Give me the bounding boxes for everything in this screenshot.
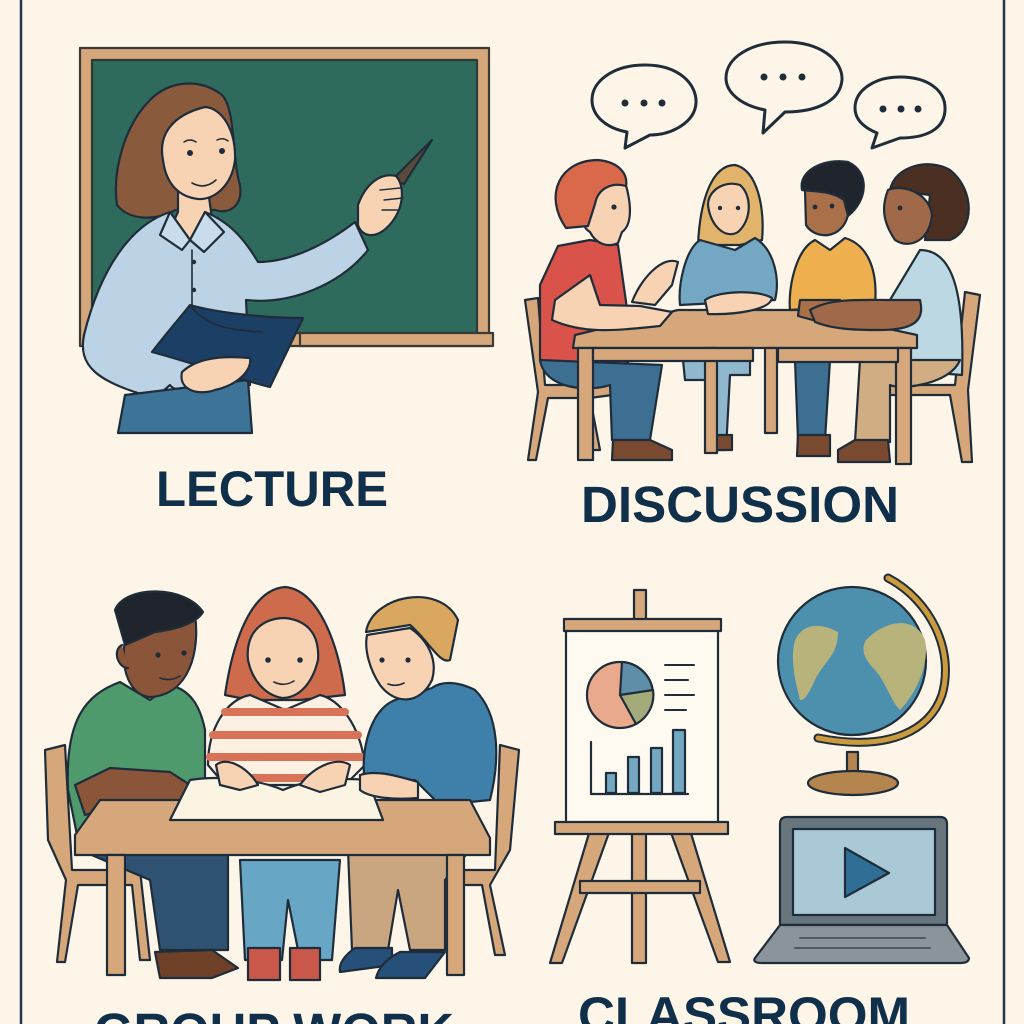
student: green shirt xyxy=(68,591,238,978)
laptop with play icon xyxy=(754,817,969,963)
panel: group work xyxy=(45,587,519,980)
student: striped shirt xyxy=(208,587,365,980)
table xyxy=(573,310,917,464)
easel xyxy=(550,590,730,963)
hand and pointer xyxy=(392,140,432,184)
panel: lecture xyxy=(80,48,493,433)
hands on book xyxy=(216,762,418,799)
heading: lecture: LECTURE xyxy=(156,461,388,517)
student: blue sweater xyxy=(340,597,496,978)
panel: classroom xyxy=(550,578,969,963)
book xyxy=(152,305,303,387)
heading: discussion: DISCUSSION xyxy=(581,476,899,533)
table xyxy=(75,800,490,975)
teacher xyxy=(83,84,432,433)
pie chart xyxy=(587,662,653,728)
hands on table xyxy=(552,261,921,330)
chalkboard xyxy=(80,48,493,346)
speech bubbles xyxy=(592,42,945,148)
open book xyxy=(170,778,383,820)
bar chart xyxy=(591,730,688,794)
panel: discussion xyxy=(525,42,980,464)
student: curly hair xyxy=(838,164,969,462)
student: blond xyxy=(680,165,777,450)
student: yellow shirt xyxy=(790,161,876,456)
chairs xyxy=(525,292,980,462)
chairs xyxy=(45,745,519,962)
student: red shirt xyxy=(540,160,672,460)
globe xyxy=(778,578,945,795)
